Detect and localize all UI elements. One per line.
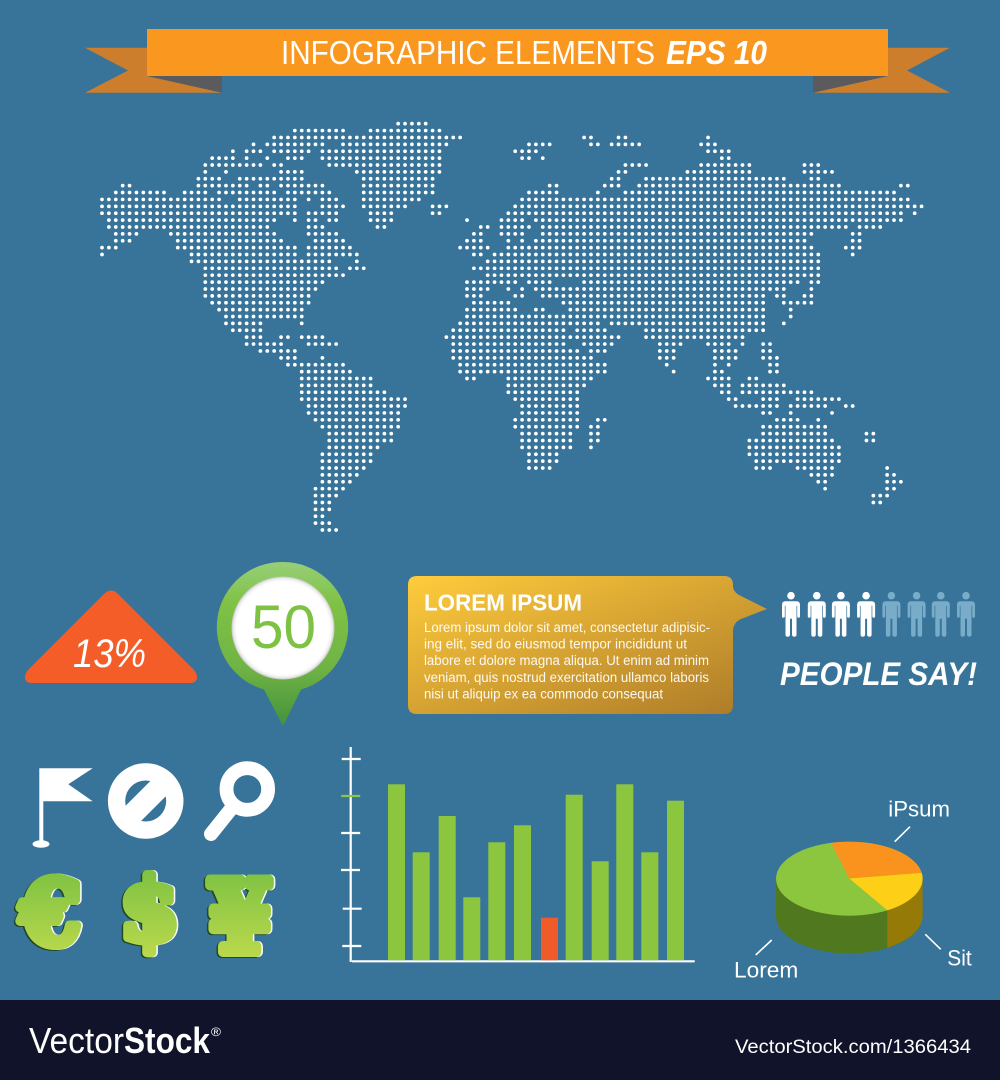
bubble body text: nisi ut aliquip ex ea commodo consequat	[424, 686, 663, 702]
pie label Lorem: Lorem	[734, 957, 798, 982]
pie chart	[734, 797, 972, 982]
pin inner disc	[232, 576, 334, 680]
icon: prohibited	[108, 763, 184, 839]
bubble body text: Lorem ipsum dolor sit amet, consectetur adipisic-	[424, 620, 710, 635]
ribbon left tail	[85, 48, 222, 93]
icon: yen: ¥	[208, 860, 272, 976]
icon: euro: €	[21, 861, 82, 965]
pie side brown	[887, 875, 923, 948]
bar chart	[341, 747, 695, 962]
icon: flag	[32, 768, 93, 848]
icon: magnifier	[211, 768, 268, 834]
speech bubble	[408, 576, 767, 714]
title ribbon	[85, 29, 950, 93]
ribbon right fold	[813, 76, 888, 93]
pie label iPsum: iPsum	[888, 797, 950, 822]
dotted world map	[102, 124, 922, 530]
filled people	[782, 592, 875, 637]
muted people	[882, 592, 975, 637]
ribbon band	[147, 29, 888, 76]
bubble body text: labore et dolore magna aliqua. Ut enim ad minim	[424, 653, 709, 668]
icon: euro: €	[18, 862, 79, 966]
triangle badge 13%	[25, 590, 197, 683]
triangle shape	[25, 590, 197, 683]
icon: yen: ¥	[206, 861, 270, 977]
pin value: 50	[251, 593, 316, 661]
footer logo bold: Stock	[124, 1020, 211, 1061]
chart axes	[341, 747, 695, 962]
bubble heading: LOREM IPSUM	[424, 590, 582, 616]
bubble body text: veniam, quis nostrud exercitation ullamco laboris	[424, 670, 709, 685]
chart bars	[388, 784, 684, 960]
triangle value: 13%	[73, 632, 146, 676]
title text: INFOGRAPHIC ELEMENTS	[281, 34, 655, 71]
bubble body text: ing elit, sed do eiusmod tempor incididunt ut	[424, 636, 687, 652]
people pictogram	[782, 592, 975, 637]
pie top green	[776, 842, 923, 916]
footer logo: Vector	[29, 1020, 124, 1061]
bubble body text	[424, 620, 710, 702]
people say heading: PEOPLE SAY!	[780, 656, 977, 692]
bubble shape	[408, 576, 767, 714]
icon: yen: ¥	[210, 860, 274, 976]
map pin badge 50	[217, 562, 348, 726]
icon: dollar: $	[121, 860, 181, 961]
pie top orange	[831, 842, 922, 878]
pie label Sit: Sit	[947, 946, 972, 971]
pie label lines	[756, 827, 941, 955]
footer registered mark: ®	[211, 1025, 221, 1039]
icon: dollar: $	[118, 861, 178, 962]
footer bar	[0, 1000, 1000, 1080]
title emphasis: EPS 10	[666, 34, 768, 71]
icon: dollar: $	[120, 860, 180, 961]
ribbon left fold	[147, 76, 222, 93]
footer url: VectorStock.com/1366434	[735, 1036, 971, 1058]
icon: euro: €	[20, 861, 81, 965]
pie side green	[776, 879, 923, 953]
ribbon right tail	[813, 48, 950, 93]
pin body	[217, 562, 348, 726]
pie top yellow	[849, 873, 923, 910]
